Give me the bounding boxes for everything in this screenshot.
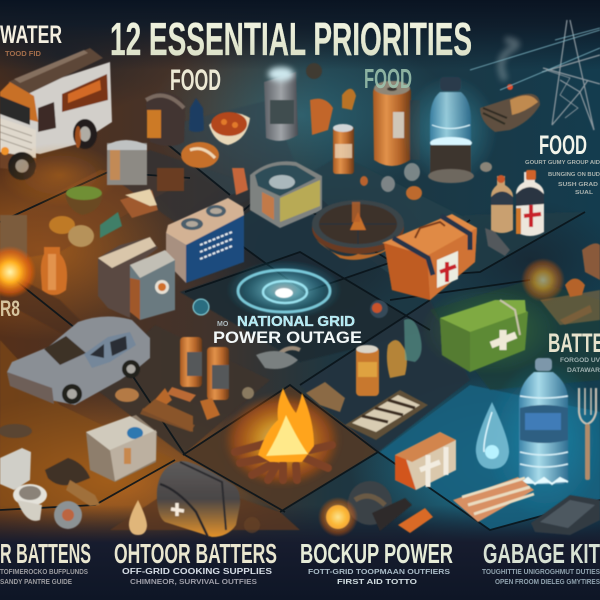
icon: canned food and tent item (256, 319, 428, 440)
text: food caption right: SUSH GRAD (558, 182, 598, 188)
icon: power pylon (470, 20, 600, 130)
text: bottom column three: FOTT-GRID TOOPMAAN OUTFIERS (308, 567, 450, 576)
icon: orange first aid case (382, 214, 477, 300)
text: water garbled caption: TOOD FID (5, 51, 41, 58)
text: bottom column two: OFF-GRID COOKING SUPPLIES (122, 567, 273, 576)
icon: roulette style bowl (312, 200, 404, 260)
icon: metal first aid case (157, 461, 240, 537)
icon: utility truck (0, 48, 112, 180)
text: food heading left: FOOD (170, 64, 221, 97)
icon: food jar and bowl (146, 92, 250, 168)
icon: fork (579, 388, 596, 480)
icon: big water bottle (485, 358, 600, 520)
icon: gold water drop (129, 500, 260, 535)
text: food caption right: GOURT GUMY GROUP AID (525, 160, 600, 166)
icon: batteries (98, 198, 244, 320)
text: central heading: POWER OUTAGE (213, 328, 362, 347)
text: bottom column two: CHIMNEOR, SURVIVAL OUTFIES (130, 579, 257, 586)
text: food caption right: BUNGING ON BUD (548, 172, 600, 178)
text: batteries heading right (548, 328, 600, 374)
text: food heading centre: FOOD (364, 63, 412, 94)
icon: orange first aid box (395, 432, 456, 490)
icon: stones on the floor (360, 162, 492, 200)
text: batteries heading right: DATAWAR (567, 368, 600, 374)
icon: large jar (264, 67, 298, 141)
text: fragment left: R8 (0, 296, 20, 321)
icon: toilet (0, 448, 47, 521)
text: bottom column one (0, 538, 91, 586)
icon: center glowing ring (193, 260, 388, 320)
text: bottom column one: TOFIMEROCKO BUFPLUNDS (0, 569, 88, 576)
text: bottom column one: SANDY PANTRE GUIDE (0, 579, 72, 586)
icon: fire glow left with bottle (0, 215, 67, 298)
icon: striped blanket (453, 477, 534, 522)
text: food caption right: SUAL (575, 190, 594, 196)
icon: green first aid bag (420, 285, 600, 375)
icon: smoking food tray (480, 40, 540, 132)
text: central heading: NATIONAL GRID (237, 313, 355, 330)
icon: orange canisters (115, 337, 254, 432)
text: bottom column three: FIRST AID TOTTO (337, 577, 417, 586)
text: food caption right (525, 160, 600, 196)
icon: silver sedan (7, 316, 150, 405)
icon: orange drum and can (306, 63, 420, 174)
text: central heading: MO (217, 321, 229, 328)
floor panels (0, 100, 600, 530)
icon: wood crate and food basket (0, 140, 184, 247)
text: batteries heading right: FORGOD UV (560, 358, 600, 364)
icon: dark radio and tablet (318, 481, 600, 537)
icon: water bottle with glow (402, 75, 498, 185)
icon: glow and tools near first aid (521, 243, 600, 302)
panel edges (0, 130, 600, 530)
text: bottom column three: BOCKUP POWER (300, 538, 453, 569)
text: bottom column two: OHTOOR BATTERS (114, 538, 277, 569)
icon: campfire (224, 388, 340, 486)
text: bottom column one: R BATTENS (0, 538, 91, 569)
text: water heading: WATER (0, 21, 62, 49)
icon: supply box (86, 415, 157, 482)
text: bottom column three (300, 538, 453, 586)
icon: red cross bottles (485, 170, 544, 256)
text: central heading (213, 313, 362, 347)
icon: ration box (232, 161, 322, 228)
text: bottom column four (482, 538, 600, 586)
text: bottom column two (114, 538, 277, 586)
icon: bag and small items (0, 424, 100, 529)
icon: water droplet (476, 402, 509, 469)
